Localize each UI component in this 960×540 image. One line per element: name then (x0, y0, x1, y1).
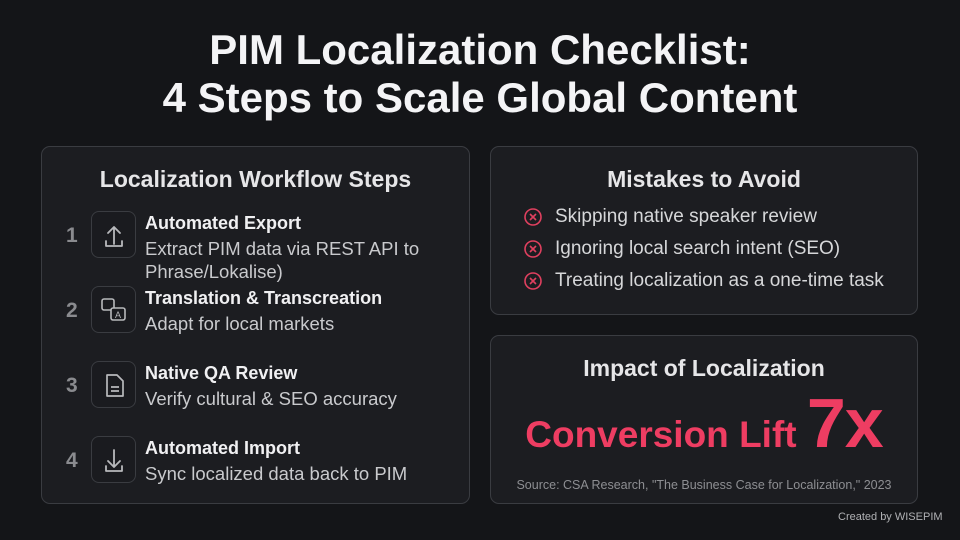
step 4: Sync localized data back to PIM (145, 463, 407, 484)
mistake 3: Treating localization as a one-time task (555, 270, 884, 291)
step 2: Adapt for local markets (145, 313, 334, 334)
title: 4 Steps to Scale Global Content (163, 74, 797, 121)
source: Source: CSA Research, "The Business Case for Localization," 2023 (516, 478, 892, 492)
step 1: Automated Export (145, 213, 301, 233)
step 1: Extract PIM data via REST API to (145, 238, 419, 259)
step 1 (66, 211, 419, 282)
step 2: Translation & Transcreation (145, 288, 382, 308)
icon: download (91, 436, 136, 483)
mistake 1: Skipping native speaker review (555, 206, 817, 227)
step 4: Automated Import (145, 438, 300, 458)
panel: workflow steps (41, 146, 470, 504)
step 3: 3 (66, 374, 78, 397)
step 4 (66, 436, 407, 484)
panel: mistakes (490, 146, 918, 315)
icon: upload (91, 211, 136, 258)
heading: workflow: Localization Workflow Steps (100, 166, 411, 192)
mistake 2: Ignoring local search intent (SEO) (555, 238, 840, 259)
step 2 (66, 286, 382, 334)
stat: conversion lift 7x: Conversion Lift 7x (525, 384, 883, 462)
panel: impact (490, 335, 918, 504)
icon: document (91, 361, 136, 408)
step 4: 4 (66, 449, 78, 472)
icon: translate (91, 286, 136, 333)
heading: impact: Impact of Localization (583, 355, 825, 381)
icon: translate: A (115, 310, 121, 320)
step 3: Native QA Review (145, 363, 297, 383)
title: PIM Localization Checklist: (209, 26, 751, 73)
credit: Created by WISEPIM (838, 511, 943, 523)
step 3 (66, 361, 397, 409)
step 1: Phrase/Lokalise) (145, 261, 283, 282)
step 1: 1 (66, 224, 78, 247)
heading: mistakes: Mistakes to Avoid (607, 166, 801, 192)
title (163, 26, 797, 121)
step 2: 2 (66, 299, 78, 322)
step 3: Verify cultural & SEO accuracy (145, 388, 397, 409)
